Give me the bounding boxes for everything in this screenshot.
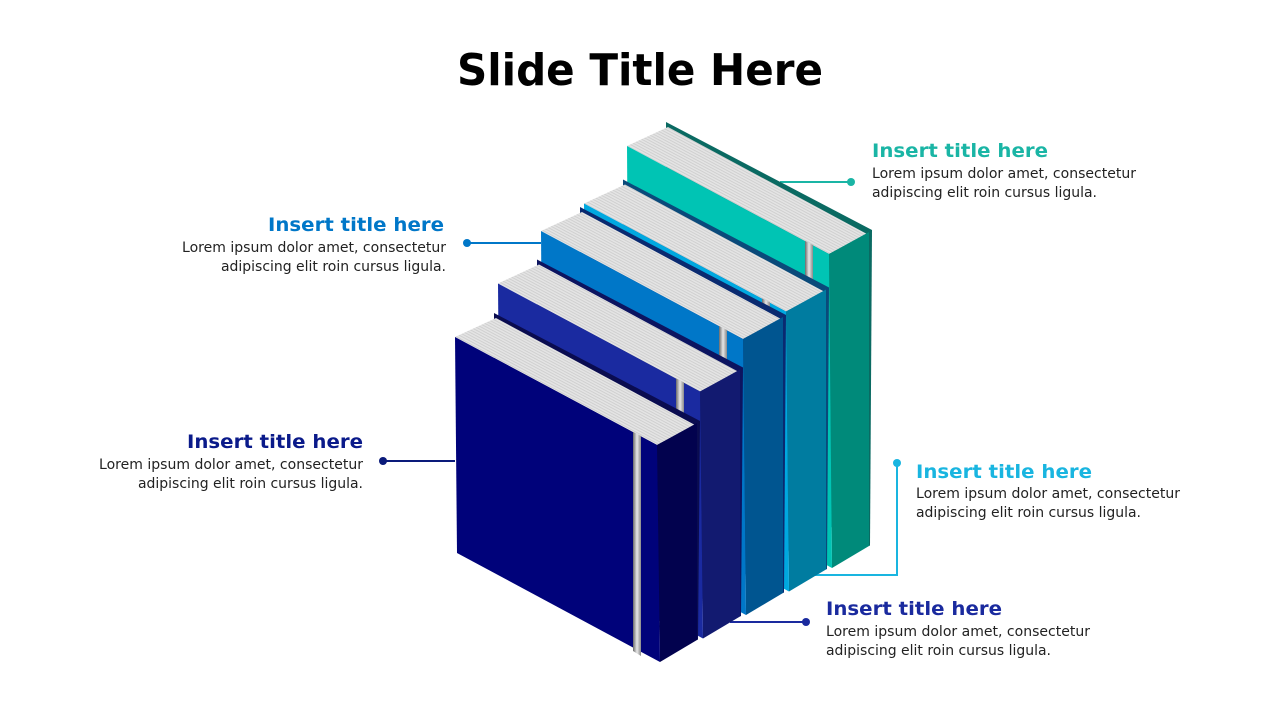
text: left bottom: Lorem ipsum dolor amet, consectetur bbox=[99, 457, 363, 473]
text: left top: Lorem ipsum dolor amet, consectetur bbox=[182, 240, 446, 256]
text: left bottom bbox=[99, 431, 363, 492]
book stack bbox=[455, 122, 872, 662]
book 1 navy bbox=[455, 313, 700, 662]
text: left top: Insert title here bbox=[268, 214, 444, 236]
text: bottom: Insert title here bbox=[826, 598, 1002, 620]
text: top right bbox=[872, 140, 1136, 201]
connector lines bbox=[383, 182, 897, 622]
dots bbox=[379, 178, 901, 626]
title: Slide Title Here bbox=[457, 45, 823, 96]
text: top right: adipiscing elit roin cursus ligula. bbox=[872, 185, 1097, 201]
text: left top: adipiscing elit roin cursus ligula. bbox=[221, 259, 446, 275]
text: bottom: Lorem ipsum dolor amet, consectetur bbox=[826, 624, 1090, 640]
text: right middle: adipiscing elit roin cursus ligula. bbox=[916, 505, 1141, 521]
text: left top bbox=[182, 214, 446, 275]
text: left bottom: adipiscing elit roin cursus ligula. bbox=[138, 476, 363, 492]
text: bottom: adipiscing elit roin cursus ligula. bbox=[826, 643, 1051, 659]
text: top right: Insert title here bbox=[872, 140, 1048, 162]
book 2 royal blue bbox=[498, 260, 743, 638]
text: left bottom: Insert title here bbox=[187, 431, 363, 453]
book 5 teal bbox=[627, 122, 872, 568]
text: bottom bbox=[826, 598, 1090, 659]
book 4 light blue bbox=[584, 180, 829, 592]
text: top right: Lorem ipsum dolor amet, consectetur bbox=[872, 166, 1136, 182]
book 3 blue bbox=[541, 207, 786, 615]
text: right middle bbox=[916, 461, 1180, 521]
text: right middle: Insert title here bbox=[916, 461, 1092, 483]
text: right middle: Lorem ipsum dolor amet, consectetur bbox=[916, 486, 1180, 502]
